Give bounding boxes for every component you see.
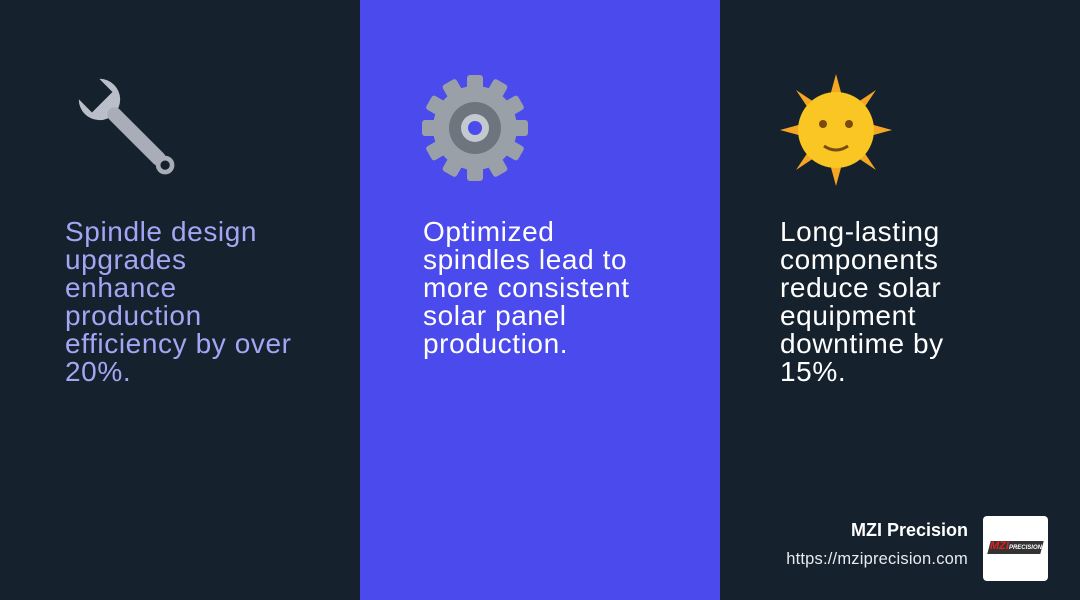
text: efficiency [65,216,292,387]
text: efficiency: production [65,300,202,331]
panel: left [0,0,360,600]
text: consistency: solar panel [423,300,567,331]
text: consistency: more consistent [423,272,630,303]
text: downtime: 15%. [780,356,846,387]
text: efficiency: upgrades [65,244,187,275]
text: efficiency: Spindle design [65,216,257,247]
logo: MZIPRECISION [990,540,1042,552]
logo [983,516,1048,581]
panel: right [720,0,1080,600]
panel: middle [360,0,720,600]
text: consistency: Optimized [423,216,554,247]
text: downtime [780,216,944,387]
brand block [786,516,1048,581]
text: downtime: Long-lasting [780,216,940,247]
text: efficiency: enhance [65,272,177,303]
icon: gear [422,75,528,181]
text: efficiency: efficiency by over [65,328,292,359]
text: downtime: reduce solar [780,272,941,303]
icon: wrench [78,78,174,174]
text: downtime: components [780,244,939,275]
brand url: https://mziprecision.com [786,550,968,568]
text: downtime: equipment [780,300,916,331]
text: downtime: downtime by [780,328,944,359]
icon: sun [780,74,892,186]
text: consistency: spindles lead to [423,244,627,275]
brand name: MZI Precision [851,520,968,540]
text: consistency: production. [423,328,568,359]
text: consistency [423,216,630,359]
text: efficiency: 20%. [65,356,131,387]
